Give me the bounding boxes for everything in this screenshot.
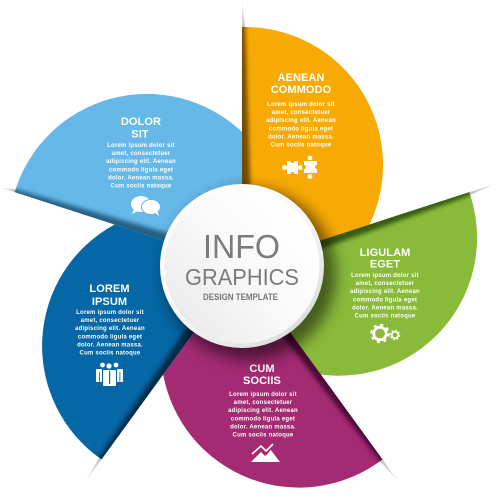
heading: LOREM <box>89 283 130 295</box>
body text: Cum sociis natoque <box>355 314 416 320</box>
icon: gears <box>371 325 400 342</box>
heading: AENEAN <box>277 72 325 84</box>
body text: Cum sociis natoque <box>233 432 294 438</box>
body text: Cum sociis natoque <box>271 142 332 148</box>
icon: speech bubbles <box>131 196 160 216</box>
body text: Lorem ipsum dolor sit <box>229 392 297 398</box>
body text: dolor. Aenean massa. <box>268 134 334 140</box>
body text: commodo ligula eget <box>353 297 417 303</box>
body text: dolor. Aenean massa. <box>108 175 174 181</box>
panel: Dolor Sit <box>3 94 242 241</box>
body text: commodo ligula eget <box>109 167 173 173</box>
body text: commodo ligula eget <box>78 334 142 340</box>
heading: SOCIIS <box>243 375 281 387</box>
body text: Cum sociis natoque <box>80 350 141 356</box>
body text: dolor. Aenean massa. <box>77 342 143 348</box>
body text: Lorem ipsum dolor sit <box>351 273 419 279</box>
icon: people <box>96 363 123 386</box>
title: INFO: INFO <box>203 228 280 265</box>
green petal <box>290 184 494 376</box>
heading: EGET <box>370 258 400 270</box>
body text: commodo ligula eget <box>231 416 295 422</box>
light blue petal <box>3 94 242 241</box>
heading: COMMODO <box>271 84 332 96</box>
body text: amet, consectetuer <box>356 281 415 287</box>
heading: CUM <box>249 363 275 375</box>
body text: amet, consectetuer <box>81 318 140 324</box>
body text: adipiscing elit. Aenean <box>75 326 145 332</box>
heading: IPSUM <box>92 296 127 308</box>
body text: Lorem ipsum dolor sit <box>267 102 335 108</box>
purple petal <box>163 332 397 488</box>
panel: Lorem Ipsum <box>42 224 194 480</box>
panel: Ligulam Eget <box>290 184 494 376</box>
panel: Cum Sociis <box>163 332 397 488</box>
body text: adipiscing elit. Aenean <box>228 408 298 414</box>
body text: Lorem ipsum dolor sit <box>76 310 144 316</box>
body text: commodo ligula eget <box>269 126 333 132</box>
title: GRAPHICS: GRAPHICS <box>185 264 299 290</box>
body text: Lorem ipsum dolor sit <box>107 143 175 149</box>
icon: mountain chart <box>251 444 280 462</box>
heading: LIGULAM <box>360 247 410 259</box>
center circle <box>160 184 336 360</box>
body text: amet, consectetuer <box>112 151 171 157</box>
body text: dolor. Aenean massa. <box>230 424 296 430</box>
heading: SIT <box>131 128 149 140</box>
body text: amet, consectetuer <box>272 110 331 116</box>
icon: puzzle pieces <box>282 156 319 179</box>
body text: Cum sociis natoque <box>111 184 172 190</box>
subtitle: DESIGN TEMPLATE <box>203 292 278 303</box>
dark blue petal <box>42 224 194 480</box>
body text: amet, consectetuer <box>234 400 293 406</box>
panel: Aenean Commodo <box>242 4 384 240</box>
body text: dolor. Aenean massa. <box>352 305 418 311</box>
body text: adipiscing elit. Aenean <box>106 159 176 165</box>
orange petal <box>242 4 384 240</box>
body text: adipiscing elit. Aenean <box>266 118 336 124</box>
body text: adipiscing elit. Aenean <box>350 289 420 295</box>
heading: DOLOR <box>121 116 161 128</box>
